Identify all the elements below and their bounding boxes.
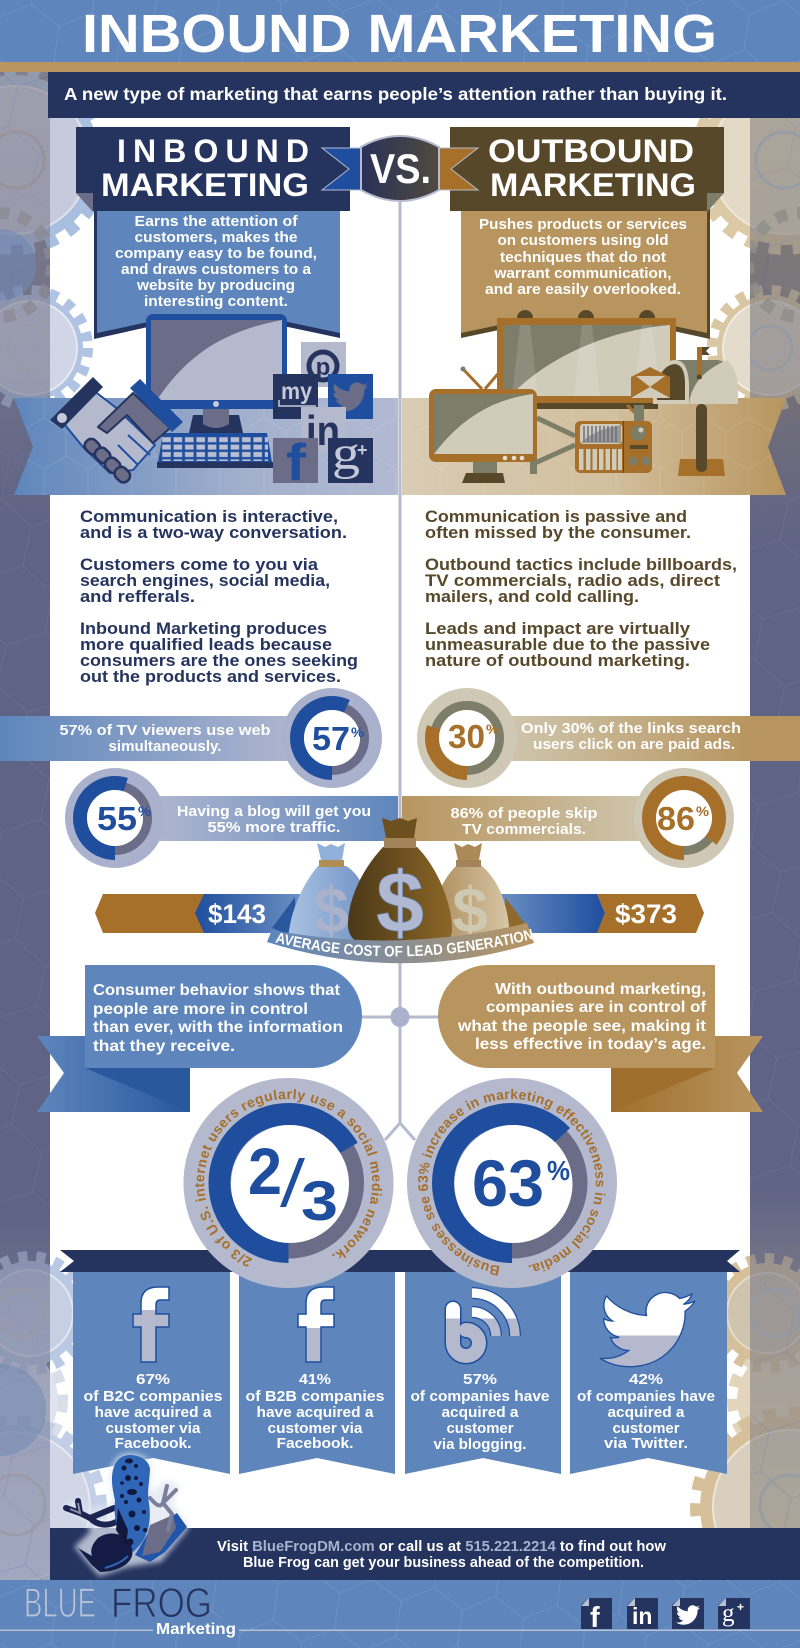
column: 41% facebook B2B: Facebook. [276,1436,354,1452]
text block: inbound benefits: search engines, social media, [80,572,330,590]
text block: inbound benefits: more qualified leads because [80,636,332,654]
panel: inbound description: Earns the attention of [134,214,298,230]
ribbon: navy bar [60,1250,740,1272]
text block: inbound benefits: and is a two-way conversation. [80,524,347,542]
callout: outbound control: With outbound marketing, [495,981,706,998]
stat: 30% of links: Only 30% of the links search [521,720,741,737]
curved banner: average cost of lead generation: AVERAGE COST OF LEAD GENERATION [275,928,533,956]
callout: consumer behavior: people are more in control [93,1001,308,1018]
text block: outbound drawbacks [425,508,737,670]
text block: inbound benefits: and refferals. [80,588,195,606]
text block: inbound benefits: Inbound Marketing produces [80,620,327,638]
footer call to action bar: Visit BlueFrogDM.com or call us at 515.221.2214 to find out how [217,1539,667,1555]
stat: 30% of links: users click on are paid ads. [533,736,735,753]
icon: google plus tile: + [357,440,368,460]
footer band [0,1580,800,1648]
column: 67% facebook B2C: 67% [136,1372,170,1388]
text block: outbound drawbacks: Leads and impact are virtually [425,620,691,638]
cost bar: inbound $143: $143 [208,899,266,929]
icon: pinterest tile [301,342,346,387]
text block: inbound benefits: Customers come to you via [80,556,319,574]
illustration band left [14,398,398,495]
column: 41% facebook B2B [239,1272,395,1474]
stat: 55% blog traffic [65,768,398,868]
text block: outbound drawbacks: often missed by the consumer. [425,524,691,542]
panel: outbound description: on customers using old [498,233,668,249]
header band [0,0,800,62]
big stat: 63% increase in effectiveness: 63 [472,1146,544,1220]
stat: 57% of TV viewers: 57% of TV viewers use web [60,722,270,739]
text block: inbound benefits: out the products and services. [80,668,341,686]
icon: facebook tile: f [286,434,307,492]
icon: brown money bag [348,818,452,951]
vs badge: VS. [370,145,431,192]
stat: 57% of TV viewers: simultaneously. [108,738,222,755]
callout: outbound control: companies are in control of [486,999,707,1016]
panel: inbound description: website by producing [136,278,295,294]
icon: pinterest tile: p [316,354,330,381]
panel: inbound description: and draws customers to a [121,262,312,278]
text block: inbound benefits [80,508,358,686]
icon: television [429,366,575,483]
icon: billboard [497,310,676,409]
icon: google plus [718,1598,750,1629]
callout: outbound control: what the people see, making it [457,1018,707,1035]
stat: 30% of links: 30 [448,718,485,755]
footer call to action bar [50,1528,800,1580]
icon: radio [575,405,652,473]
title: INBOUND MARKETING [82,4,717,64]
heading: inbound marketing: INBOUND [117,133,309,169]
callout: consumer behavior: Consumer behavior shows that [93,982,341,999]
subtitle bar: A new type of marketing that earns people’s attention rather than buying it. [64,84,727,104]
panel: outbound description: techniques that do not [500,250,666,266]
icon: blog [453,1293,515,1356]
icon: linkedin tile: in [306,407,340,454]
column: 57% blogging: of companies have [410,1389,550,1405]
footer call to action bar: Blue Frog can get your business ahead of the competition. [243,1555,644,1571]
icon: keyboard [157,433,273,468]
panel: outbound description: warrant communication, [493,266,672,282]
icon: twitter [600,1293,695,1367]
center divider line [398,200,402,1125]
column: 41% facebook B2B: have acquired a [256,1405,374,1421]
icon: myspace tile: my [281,378,312,404]
column: 57% blogging: via blogging. [434,1437,526,1453]
stat: 55% blog traffic: 55 [97,800,137,837]
icon: twitter [672,1598,704,1629]
illustration band right [402,398,786,495]
column: 42% twitter: of companies have [577,1389,715,1405]
panel: outbound description: and are easily overlooked. [485,282,681,298]
panel: inbound description: customers, makes the [134,230,298,246]
column: 42% twitter [570,1272,727,1474]
panel: inbound description: interesting content. [144,294,288,310]
column: 67% facebook B2C: customer via [106,1421,201,1437]
stat: 55% blog traffic: % [138,803,152,819]
stat: 86% skip commercials: 86 [657,800,695,837]
icon: mailbox [631,347,738,476]
heading: inbound marketing [76,127,350,212]
icon: facebook [133,1287,169,1362]
icon: twitter tile [328,374,373,419]
stat: 55% blog traffic: 55% more traffic. [208,819,340,836]
icon: google plus tile [328,427,373,483]
icon: tan money bag [430,843,510,946]
tan divider [0,62,800,72]
text block: outbound drawbacks: mailers, and cold calling. [425,588,639,606]
panel: inbound description [94,207,340,339]
icon: facebook [298,1287,334,1362]
column: 67% facebook B2C: have acquired a [94,1405,212,1421]
callout: consumer behavior: that they receive. [93,1038,235,1055]
big stat: 2/3 of internet users: 2 [248,1134,282,1208]
heading: outbound marketing [450,127,724,212]
stat: 30% of links: % [486,721,500,737]
cost bar: inbound $143 [95,894,300,938]
column: 41% facebook B2B: of B2B companies [246,1389,384,1405]
stat: 30% of links [417,688,800,788]
heading: inbound marketing: MARKETING [101,167,309,203]
icon: handshake [50,377,183,485]
callout: consumer behavior [37,965,362,1112]
panel: outbound description: Pushes products or services [479,217,687,233]
text block: outbound drawbacks: Communication is passive and [425,508,687,526]
column: 41% facebook B2B: 41% [299,1372,331,1388]
stat: 57% of TV viewers [0,688,382,788]
panel: outbound description [461,207,710,339]
callout: consumer behavior: than ever, with the information [93,1019,343,1036]
text block: outbound drawbacks: TV commercials, radio ads, direct [425,572,721,590]
logo: Blue Frog Marketing: BLUE [24,1579,96,1626]
decorative gears: left blue [0,71,104,1593]
column: 67% facebook B2C: Facebook. [114,1436,192,1452]
icon: blue money bag [288,843,372,946]
column: 57% blogging: customer [446,1421,514,1437]
icon: linkedin: in [632,1603,652,1629]
big stat: 2/3 of internet users: 2/3 of U.S. internet users regularly use a social media network. [195,1089,382,1266]
column: 57% blogging: 57% [463,1372,497,1388]
icon: google plus: + [737,1600,744,1614]
vs badge [322,136,478,201]
callout: outbound control [438,965,763,1112]
stat: 86% skip commercials: 86% of people skip [450,805,598,822]
icon: blue frog mascot [65,1455,187,1574]
decorative gears: right tan [696,71,800,1601]
icon: money bags [288,818,510,951]
big stat: 63% increase in effectiveness: Businesses see 63% increase in marketing effectiveness in social media. [418,1088,606,1276]
column: 67% facebook B2C [73,1272,230,1474]
text block: inbound benefits: Communication is interactive, [80,508,338,526]
text block: outbound drawbacks: unmeasurable due to the passive [425,636,710,654]
stat: 55% blog traffic: Having a blog will get you [177,803,371,820]
heading: outbound marketing: OUTBOUND [488,133,694,169]
column: 42% twitter: via Twitter. [604,1436,688,1452]
icon: facebook [581,1598,612,1634]
cost bar: outbound $373: $373 [615,899,677,929]
right side strip [750,118,800,1528]
stat: 86% skip commercials: % [696,803,710,819]
icon: tan money bag: $ [452,874,488,946]
icon: monitor [146,314,287,433]
column: 42% twitter: customer [612,1421,680,1437]
column: 41% facebook B2B: customer via [268,1421,363,1437]
column: 57% blogging: acquired a [442,1405,519,1421]
icon: google plus tile: g [332,427,360,480]
subtitle bar [48,72,800,118]
icon: linkedin [627,1598,658,1629]
icon: brown money bag: $ [376,855,424,951]
text block: inbound benefits: consumers are the ones seeking [80,652,358,670]
icons: social media tiles [273,342,373,492]
big stat: 2/3 of internet users: 3 [301,1169,338,1232]
callout: outbound control: less effective in today’s age. [475,1036,706,1053]
logo: Blue Frog Marketing: Marketing [156,1621,236,1638]
column: 42% twitter: acquired a [608,1405,685,1421]
connector: center node [362,1007,438,1140]
big stat: 63% increase in effectiveness: % [547,1155,570,1186]
column: 67% facebook B2C: of B2C companies [84,1389,222,1405]
stat: 86% skip commercials: TV commercials. [462,821,586,838]
stat: 86% skip commercials [402,768,734,868]
icon: facebook: f [590,1602,600,1634]
column: 42% twitter: 42% [629,1372,663,1388]
logo: Blue Frog Marketing [0,1579,800,1638]
text block: outbound drawbacks: Outbound tactics include billboards, [425,556,737,574]
heading: outbound marketing: MARKETING [490,167,696,203]
column: 57% blogging [405,1272,561,1474]
logo: Blue Frog Marketing: FROG [111,1579,212,1626]
icon: facebook tile [273,434,318,492]
stat: 57% of TV viewers: % [351,724,365,740]
text block: outbound drawbacks: nature of outbound marketing. [425,652,690,670]
icon: blue money bag: $ [313,874,349,946]
stat: 57% of TV viewers: 57 [312,720,350,757]
panel: inbound description: company easy to be found, [115,246,317,262]
cost bar: outbound $373 [500,894,704,938]
left side strip [0,72,50,1580]
icon: myspace tile [273,374,318,419]
icon: google plus: g [722,1600,735,1627]
social icons [581,1598,750,1634]
